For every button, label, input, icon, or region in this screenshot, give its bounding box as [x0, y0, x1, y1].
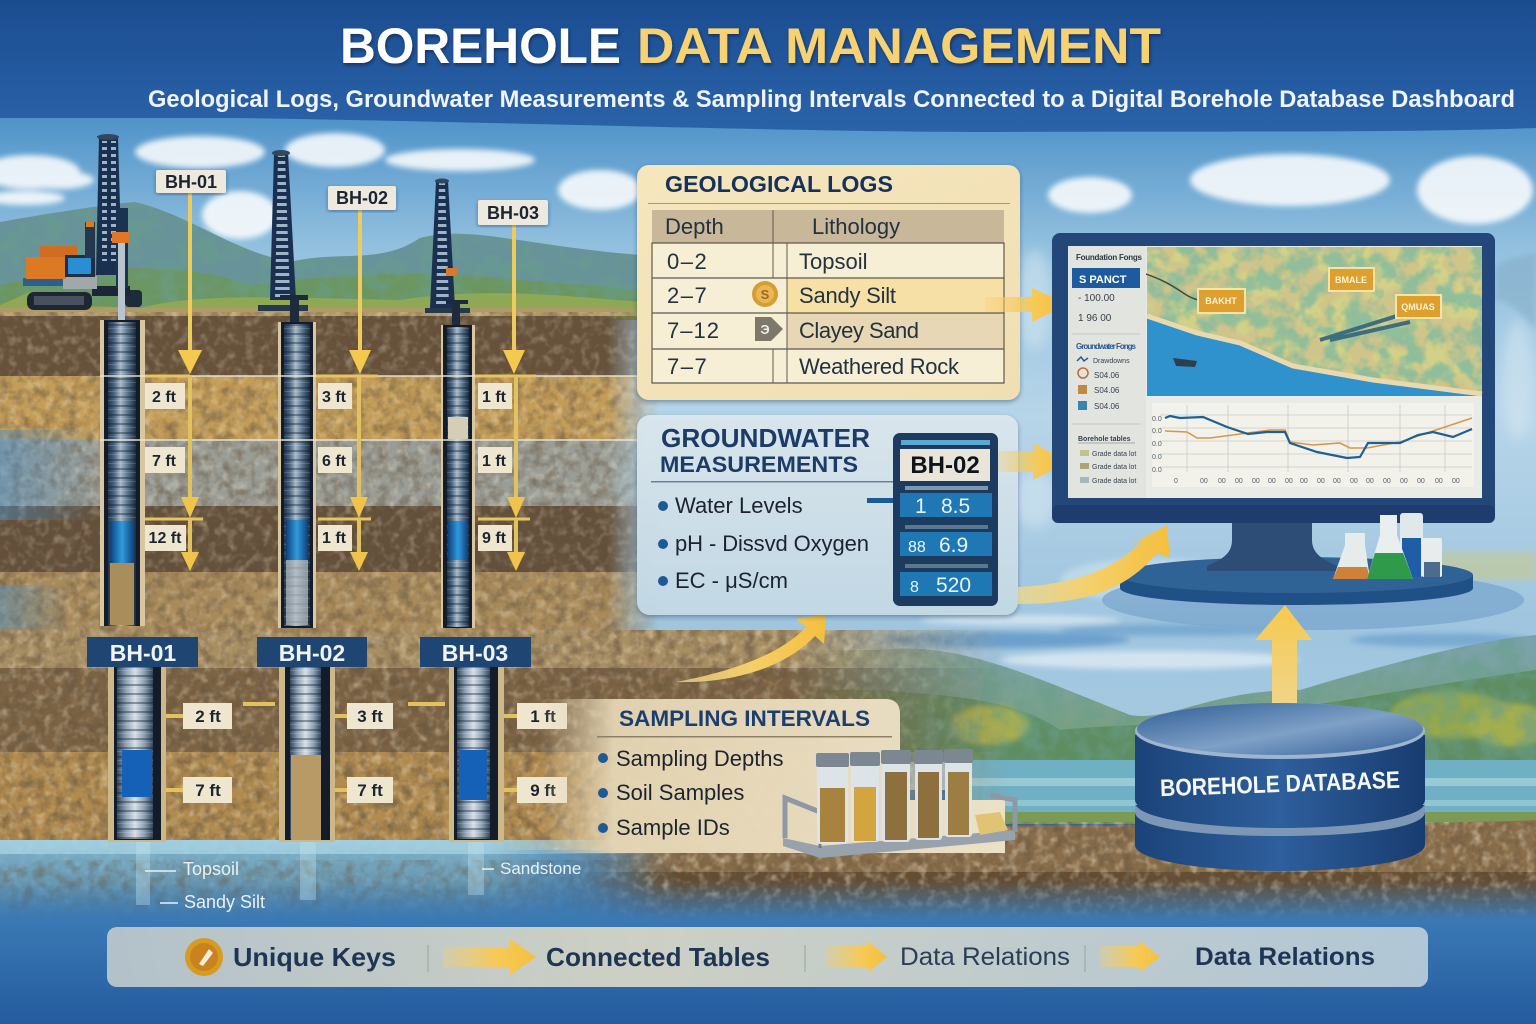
pale water ripples and low landscape: [803, 549, 1536, 824]
sidebar: Grade data lot: [1092, 478, 1136, 485]
data device BH-02: 8: [910, 579, 919, 596]
water level chart: 0.0: [1152, 467, 1162, 474]
groundwater zone under lower boreholes: [0, 840, 666, 914]
upper depth labels: 1 ft: [482, 389, 507, 406]
water level chart: 00: [1268, 478, 1276, 485]
arrow: sampling to groundwater: [676, 614, 826, 682]
logs table: [652, 210, 1004, 383]
water level chart: 00: [1252, 478, 1260, 485]
monitor platform: [1119, 557, 1473, 605]
lower borehole header tags: BH-01: [110, 640, 176, 666]
water level chart: 00: [1300, 478, 1308, 485]
arrow: keys to tables: [443, 939, 536, 975]
water level chart: 0: [1174, 478, 1178, 485]
panel: groundwater measurements: Water Levels: [675, 493, 803, 518]
water level chart: 00: [1366, 478, 1374, 485]
drill tower BH-03: [425, 178, 470, 327]
data device BH-02: [893, 433, 998, 606]
upper depth labels: 7 ft: [152, 453, 177, 470]
upper depth labels: 2 ft: [152, 389, 177, 406]
data device BH-02: BH-02: [910, 452, 980, 479]
sidebar: S04.06: [1094, 402, 1120, 411]
map: [1140, 247, 1482, 396]
borehole database cylinder: BOREHOLE DATABASE: [1160, 767, 1400, 802]
borehole database cylinder: [1135, 703, 1425, 871]
hills behind rigs: [0, 200, 640, 320]
depth arrow and tag BH-01: [156, 170, 226, 571]
map: BMALE: [1335, 275, 1367, 285]
water level chart: 00: [1400, 478, 1408, 485]
water level chart: 0.0: [1152, 428, 1162, 435]
lower depth labels: [166, 703, 567, 803]
logs table: Depth: [665, 214, 724, 239]
icon: clayey sand tag: [755, 317, 783, 341]
upper borehole BH-02: [278, 322, 316, 628]
icon: clayey sand tag: Э: [760, 322, 770, 337]
water stratum labels: Sandstone: [500, 859, 581, 878]
panel: sampling intervals: Sampling Depths: [616, 746, 784, 771]
lower borehole BH-02: [279, 667, 335, 842]
platform shadow: [1102, 570, 1524, 630]
water level chart: 00: [1235, 478, 1243, 485]
bottom legend bar: [107, 927, 1428, 987]
sidebar: S04.06: [1094, 371, 1120, 380]
water level chart: 00: [1218, 478, 1226, 485]
upper borehole BH-01: [100, 320, 145, 626]
right foreground soil: [576, 820, 1536, 918]
water level chart: 00: [1333, 478, 1341, 485]
upper depth labels: 12 ft: [149, 530, 182, 547]
lower borehole header tags: [87, 637, 531, 667]
upper depth labels: [145, 383, 512, 551]
panel: groundwater measurements: pH - Dissvd Oxygen: [675, 531, 869, 556]
bottom legend bar: Data Relations: [1195, 943, 1375, 971]
sidebar: Borehole tables: [1078, 436, 1131, 443]
depth arrow and tag BH-02: BH-02: [336, 188, 388, 208]
sidebar: Foundation Fongs: [1076, 253, 1143, 262]
upper depth labels: 3 ft: [322, 389, 347, 406]
panel: groundwater measurements: GROUNDWATER: [661, 423, 870, 453]
sidebar: Grade data lot: [1092, 464, 1136, 471]
logs table: Clayey Sand: [799, 318, 919, 343]
water level chart: 00: [1435, 478, 1443, 485]
logs table: 7–7: [667, 354, 708, 379]
bottom legend bar: Connected Tables: [546, 942, 770, 972]
logs table: 2–7: [667, 283, 708, 308]
upper depth labels: 9 ft: [482, 530, 507, 547]
dashboard monitor: [1052, 233, 1495, 571]
subtitle: Geological Logs, Groundwater Measurements & Sampling Intervals Connected to a Digital Borehole Database Dashboard: [148, 86, 1515, 113]
sidebar: Grade data lot: [1092, 451, 1136, 458]
water stratum labels: Sandy Silt: [184, 892, 265, 912]
water level chart: 00: [1285, 478, 1293, 485]
data device BH-02: 8.5: [941, 495, 970, 518]
logs table: Topsoil: [799, 249, 867, 274]
sidebar: Groundwater Fongs: [1076, 342, 1137, 351]
panel: sampling intervals: Sample IDs: [616, 815, 730, 840]
panel: geological logs: [637, 165, 1020, 400]
upper soil strata: [0, 308, 660, 633]
arrow: relations to relations: [1100, 941, 1160, 972]
lower borehole BH-03: [449, 667, 504, 842]
arrow: groundwater to dashboard: [998, 443, 1068, 480]
water level chart: 0.0: [1152, 454, 1162, 461]
lower borehole header tags: BH-03: [442, 640, 508, 666]
lower borehole header tags: BH-02: [279, 640, 345, 666]
icon: sandy silt badge: [752, 281, 778, 307]
title: BOREHOLE: [340, 18, 621, 74]
background sky: [0, 110, 1536, 790]
data device BH-02: 88: [908, 539, 926, 556]
right distant hills: [1495, 252, 1536, 330]
data device BH-02: 520: [936, 574, 971, 597]
lower depth labels: 1 ft: [530, 707, 556, 726]
stratum boundary lines: [100, 376, 640, 519]
water level chart: 00: [1350, 478, 1358, 485]
depth arrow and tag BH-03: [478, 200, 548, 571]
sample tubes in rack: [783, 749, 1015, 858]
icon: sandy silt badge: S: [761, 287, 770, 302]
water level chart: [1152, 403, 1474, 487]
upper depth labels: 1 ft: [322, 530, 347, 547]
upper depth labels: 1 ft: [482, 453, 507, 470]
lower depth labels: 2 ft: [195, 707, 221, 726]
panel: sampling intervals: Soil Samples: [616, 780, 744, 805]
water level chart: 00: [1383, 478, 1391, 485]
logs table: 7–12: [667, 318, 720, 343]
water stratum labels: [145, 859, 581, 912]
lab flasks: [1333, 513, 1442, 579]
panel: groundwater measurements: [637, 415, 1018, 615]
sidebar: S PANCT: [1079, 274, 1127, 286]
lower depth labels: 7 ft: [357, 781, 383, 800]
logs table: Weathered Rock: [799, 354, 960, 379]
panel: sampling intervals: SAMPLING INTERVALS: [619, 706, 870, 731]
drill tower BH-01: [96, 134, 129, 321]
drill tower BH-02: [258, 150, 308, 323]
sidebar: - 100.00: [1078, 293, 1115, 304]
sidebar: Drawdowns: [1093, 358, 1130, 365]
lower depth labels: 3 ft: [357, 707, 383, 726]
panel: geological logs: GEOLOGICAL LOGS: [665, 171, 893, 197]
data device BH-02: 1: [915, 495, 927, 518]
depth arrow and tag BH-03: BH-03: [487, 203, 539, 223]
water level chart: 0.0: [1152, 416, 1162, 423]
panel: groundwater measurements: MEASUREMENTS: [660, 452, 858, 477]
lower depth labels: 9 ft: [530, 781, 556, 800]
logs table: 0–2: [667, 249, 708, 274]
depth arrow and tag BH-02: [328, 186, 396, 571]
lower borehole BH-01: [108, 667, 166, 842]
clouds: [0, 133, 1533, 239]
title: DATA MANAGEMENT: [637, 18, 1161, 74]
sidebar: 1 96 00: [1078, 313, 1112, 324]
arrow: tables to relations: [825, 941, 887, 972]
upper borehole BH-03: [441, 325, 475, 628]
bottom blue band: [0, 880, 1536, 1024]
data device BH-02: 6.9: [939, 534, 968, 557]
water stratum labels: Topsoil: [183, 859, 239, 879]
water level chart: 00: [1417, 478, 1425, 485]
water level chart: 00: [1317, 478, 1325, 485]
header banner: [0, 0, 1536, 132]
bottom legend bar: Unique Keys: [233, 942, 396, 972]
arrow: database to dashboard: [1255, 605, 1312, 706]
lower soil strata: [0, 630, 1010, 850]
panel: groundwater measurements: EC - μS/cm: [675, 568, 788, 593]
logs table: Lithology: [812, 214, 900, 239]
icon: key badge: [185, 938, 223, 976]
pipe reflections in water: [136, 842, 484, 905]
excavator drilling rig: [23, 222, 142, 310]
sidebar: [1068, 246, 1146, 498]
water level chart: 00: [1200, 478, 1208, 485]
sidebar: S04.06: [1094, 386, 1120, 395]
water level chart: 0.0: [1152, 441, 1162, 448]
arrow: logs to dashboard: [985, 288, 1068, 322]
logs table: Sandy Silt: [799, 283, 896, 308]
lower depth labels: 7 ft: [195, 781, 221, 800]
panel: sampling intervals: [540, 699, 1005, 853]
arrow: sampling to dashboard: [1018, 525, 1170, 604]
map: BAKHT: [1205, 296, 1237, 306]
upper depth labels: 6 ft: [322, 453, 347, 470]
pale wash beside monitor: [1015, 250, 1534, 528]
bottom legend bar: Data Relations: [900, 943, 1070, 971]
map: QMUAS: [1401, 302, 1435, 312]
depth arrow and tag BH-01: BH-01: [165, 172, 217, 192]
water level chart: 00: [1452, 478, 1460, 485]
